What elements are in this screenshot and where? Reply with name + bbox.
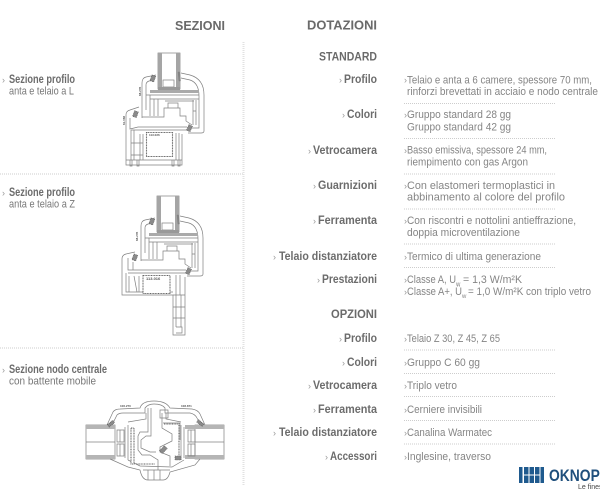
diagram: profilo anta e telaio a L <box>122 53 204 166</box>
row: Guarnizioni value: abbinamento al colore del profilo <box>407 192 565 204</box>
row: Ferramenta option label: › <box>313 405 316 415</box>
row: Ferramenta value: › <box>404 216 407 226</box>
row: Colori value <box>404 109 511 134</box>
row: Profilo option value: Telaio Z 30, Z 45, Z 65 <box>407 333 500 345</box>
text: sezione nodo centrale: › <box>2 365 5 375</box>
diagram: profilo anta e telaio a Z <box>122 196 203 335</box>
row: Vetrocamera value: riempimento con gas Argon <box>407 156 528 168</box>
row: Prestazioni value <box>404 274 591 300</box>
row: Accessori label: › <box>325 452 328 462</box>
row: Telaio distanziatore option label: › <box>273 428 276 438</box>
row: Ferramenta option value: › <box>404 405 407 415</box>
text: sezione profilo L: Sezione profilo <box>9 74 75 86</box>
row: Ferramenta option label: Ferramenta <box>318 404 378 416</box>
row: Colori option label: Colori <box>347 357 377 369</box>
row: Prestazioni value: Classe A+, Ü <box>407 286 462 298</box>
row: Vetrocamera value <box>404 144 547 168</box>
row: Prestazioni value: › <box>404 275 407 285</box>
row: Prestazioni value: w <box>455 282 461 288</box>
row: Vetrocamera label: Vetrocamera <box>313 145 378 157</box>
row: Guarnizioni label: › <box>313 181 316 191</box>
row: Vetrocamera value: Basso emissiva, spessore 24 mm, <box>407 144 547 156</box>
row: Prestazioni label: Prestazioni <box>322 274 377 286</box>
text: sezione profilo Z: anta e telaio a Z <box>9 198 75 210</box>
row: Vetrocamera label: › <box>308 146 311 156</box>
row: Vetrocamera option label: Vetrocamera <box>313 380 378 392</box>
text: sezione profilo Z <box>2 187 75 210</box>
row: Telaio distanziatore label: › <box>273 252 276 262</box>
heading: Dotazioni: DOTAZIONI <box>307 18 377 32</box>
row: Guarnizioni value <box>404 180 565 204</box>
row: Telaio distanziatore option value: Canalina Warmatec <box>407 427 492 439</box>
diagram: profilo anta e telaio a L: 61.066 <box>122 115 126 125</box>
row: Profilo label: Profilo <box>344 74 377 86</box>
row: Ferramenta value: doppia microventilazione <box>407 227 520 239</box>
row: Telaio distanziatore value: Termico di ultima generazione <box>407 251 541 263</box>
row: Ferramenta value <box>404 215 576 239</box>
sash section <box>142 53 204 133</box>
row: Vetrocamera value: › <box>404 146 407 156</box>
row: Ferramenta value: Con riscontri e nottolini antieffrazione, <box>407 215 576 227</box>
row: Vetrocamera option value: › <box>404 381 407 391</box>
row: Telaio distanziatore option label: Telaio distanziatore <box>279 427 377 439</box>
diagram: nodo centrale: 108.871 <box>181 404 192 408</box>
subheading: Standard: STANDARD <box>319 52 377 64</box>
text: sezione profilo L: anta e telaio a L <box>9 86 74 98</box>
row: Guarnizioni value: Con elastomeri termoplastici in <box>407 180 555 192</box>
row: Colori value: Gruppo standard 28 gg <box>407 109 511 121</box>
row: Colori option value: › <box>404 358 407 368</box>
row: Ferramenta label: Ferramenta <box>318 215 378 227</box>
panel: sezione profilo Z <box>2 187 203 335</box>
row: Colori value: Gruppo standard 42 gg <box>407 122 511 134</box>
row: Prestazioni value: Classe A, U <box>407 274 456 286</box>
row: Prestazioni value: = 1,3 W/m²K <box>463 274 523 286</box>
row: Accessori value: › <box>404 452 407 462</box>
row: Colori value: › <box>404 110 407 120</box>
row: Profilo option value: › <box>404 334 407 344</box>
row: Colori label: › <box>342 110 345 120</box>
diagram: profilo anta e telaio a Z: 113.016 <box>146 276 161 281</box>
row: Accessori label: Accessori <box>330 451 377 463</box>
row: Profilo option label: › <box>339 334 342 344</box>
row: Profilo label: › <box>339 75 342 85</box>
row: Colori option value: Gruppo C 60 gg <box>407 357 480 369</box>
diagram: nodo centrale <box>86 401 224 480</box>
row: Colori label: Colori <box>347 109 377 121</box>
text: sezione nodo centrale: con battente mobile <box>9 376 96 388</box>
diagram: nodo centrale: 106.270 <box>120 404 131 408</box>
heading: Sezioni: SEZIONI <box>175 18 225 33</box>
text: sezione profilo L <box>2 74 75 98</box>
subheading: Opzioni: OPZIONI <box>331 309 377 321</box>
logo: Oknoplast <box>519 467 600 491</box>
row: Vetrocamera option label: › <box>308 381 311 391</box>
row: Telaio distanziatore value: › <box>404 252 407 262</box>
glass left <box>86 425 128 460</box>
row: Prestazioni label: › <box>317 275 320 285</box>
row: Profilo value <box>404 74 598 98</box>
row: Guarnizioni label: Guarnizioni <box>318 180 377 192</box>
row: Prestazioni value: w <box>461 294 467 300</box>
row: Telaio distanziatore option value: › <box>404 428 407 438</box>
glass right <box>181 425 224 460</box>
diagram: profilo anta e telaio a Z: 68.205 <box>135 231 139 241</box>
row: Prestazioni value: › <box>404 287 407 297</box>
text: sezione nodo centrale: Sezione nodo centrale <box>9 364 107 376</box>
text: sezione profilo Z: › <box>2 188 5 198</box>
row: Ferramenta option value: Cerniere invisibili <box>407 404 482 416</box>
row: Profilo option label: Profilo <box>344 333 377 345</box>
row: Colori option label: › <box>342 358 345 368</box>
panel: sezione nodo centrale <box>2 364 224 480</box>
text: sezione profilo Z: Sezione profilo <box>9 187 75 199</box>
icon: window <box>519 467 544 483</box>
row: Accessori value: Inglesine, traverso <box>407 451 491 463</box>
text: sezione nodo centrale <box>2 364 107 388</box>
diagram: profilo anta e telaio a L: 113.026 <box>149 133 160 137</box>
row: Guarnizioni value: › <box>404 181 407 191</box>
row: Ferramenta label: › <box>313 216 316 226</box>
row: Telaio distanziatore label: Telaio distanziatore <box>279 251 377 263</box>
row: Profilo value: › <box>404 75 407 85</box>
row: Vetrocamera option value: Triplo vetro <box>407 380 457 392</box>
panel: sezione profilo L <box>2 53 204 166</box>
text: sezione profilo L: › <box>2 75 5 85</box>
diagram: profilo anta e telaio a L: 68.205 <box>138 86 142 96</box>
